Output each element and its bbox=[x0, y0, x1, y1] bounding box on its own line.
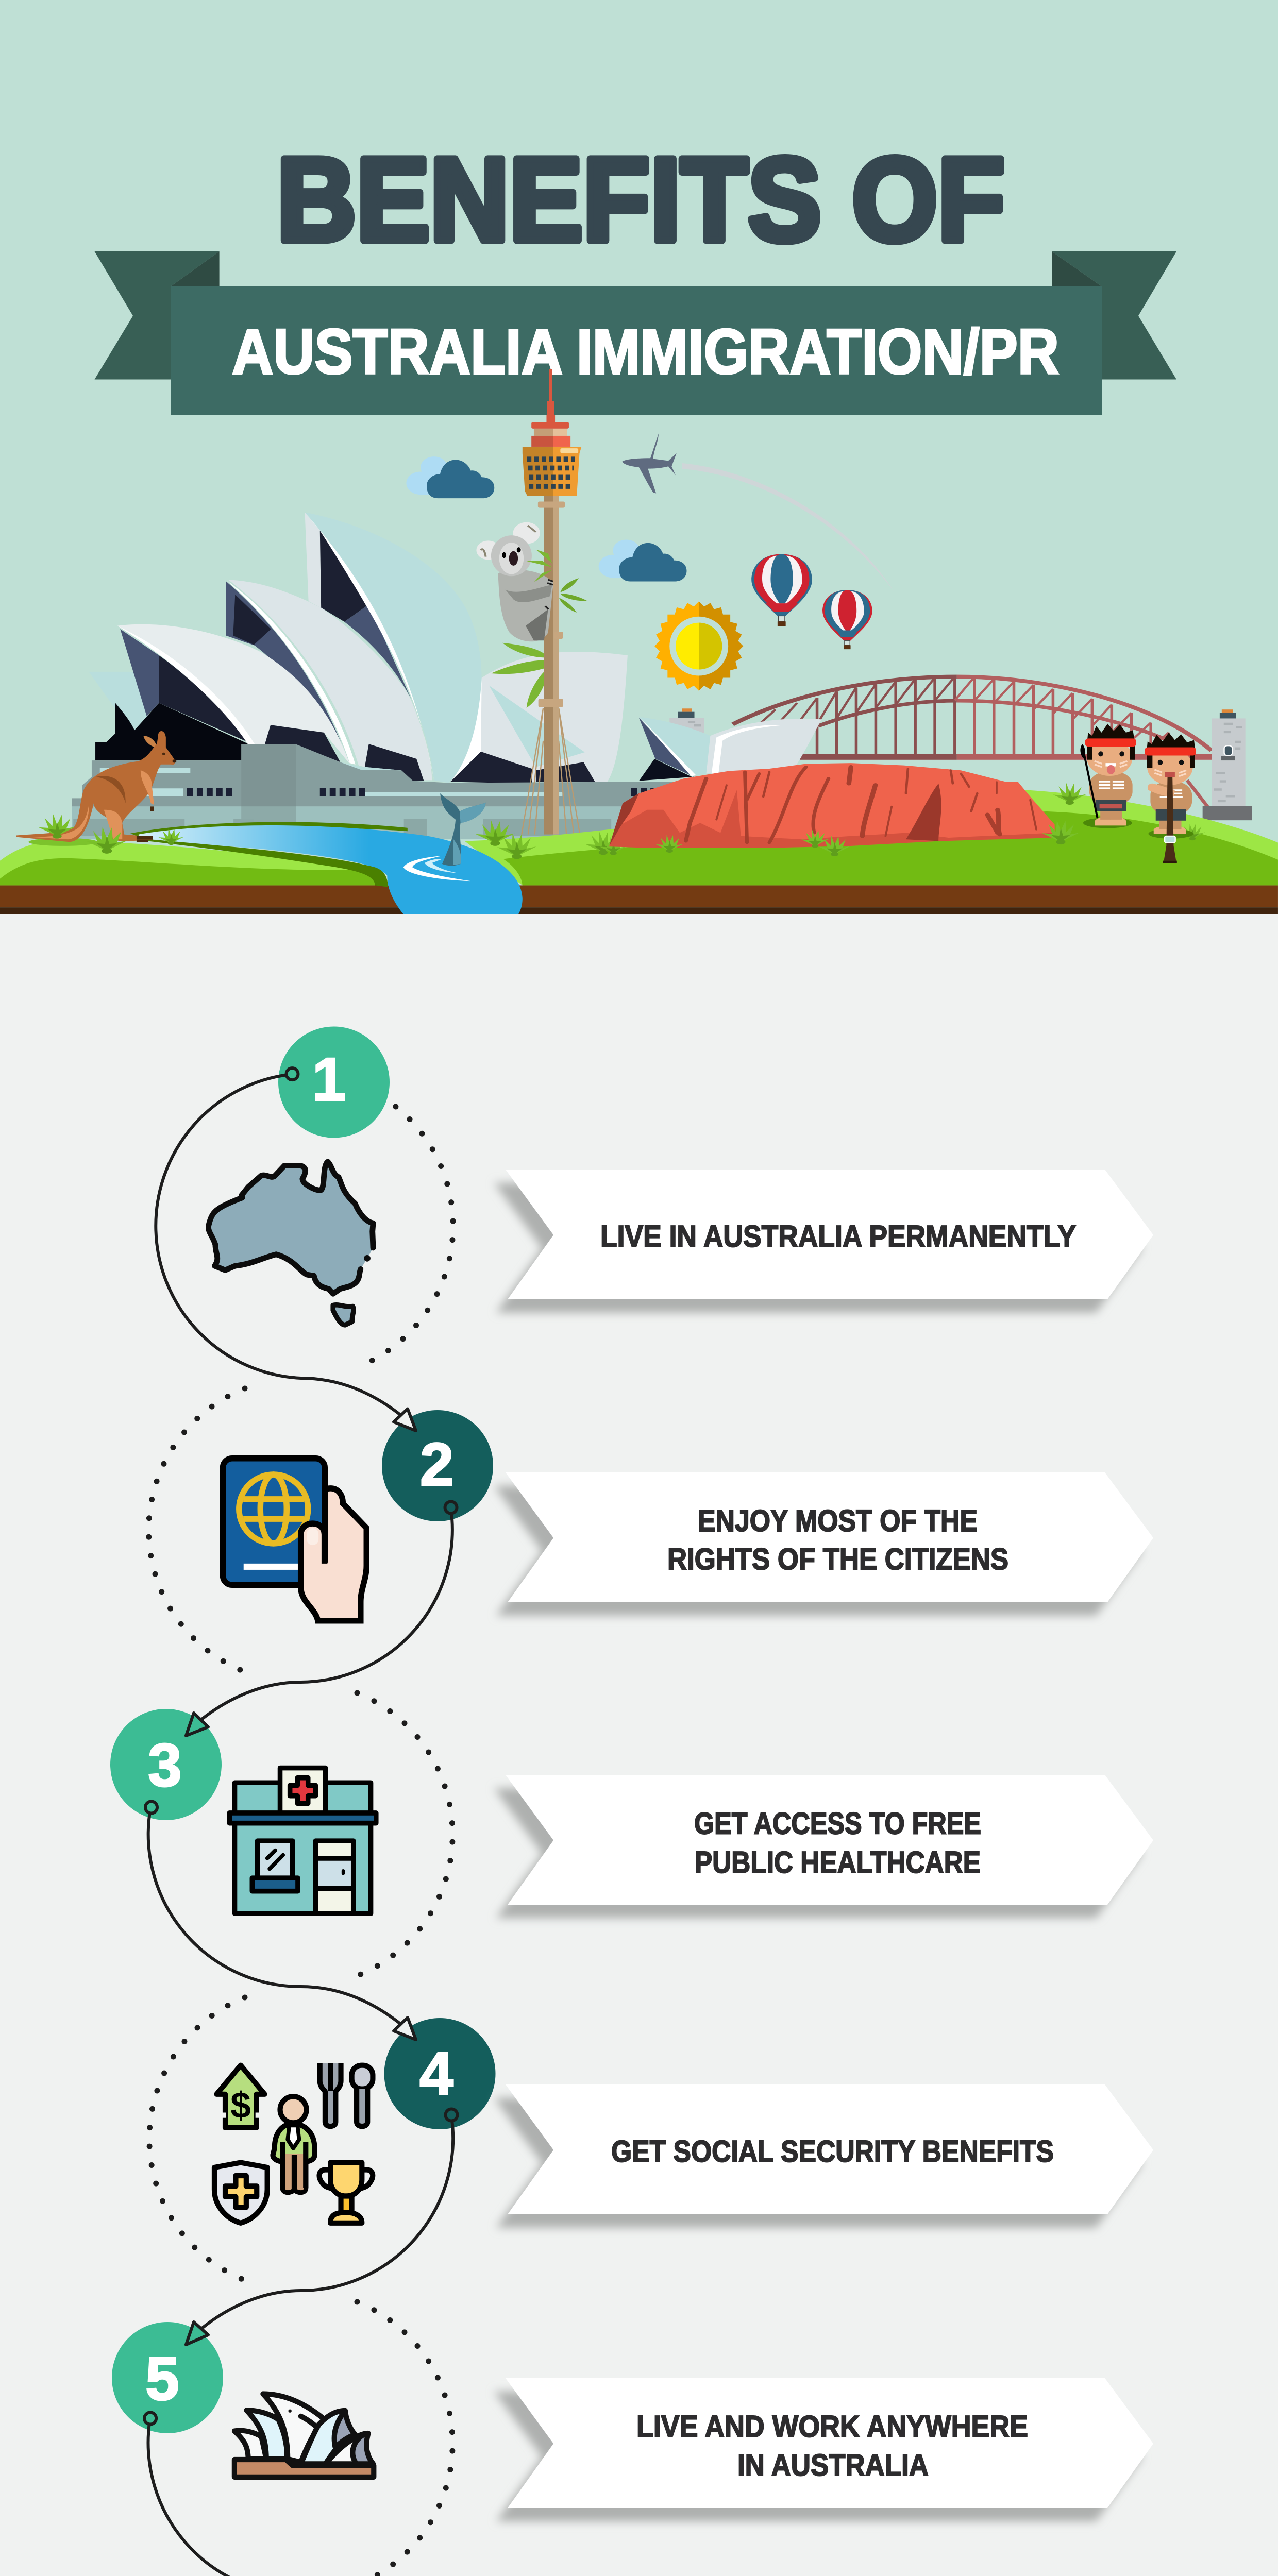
dotted guide arcs bbox=[149, 1096, 453, 2576]
tower needle over ribbon bbox=[547, 369, 554, 422]
ribbon banner body bbox=[171, 286, 1102, 415]
sun bbox=[654, 601, 743, 691]
numerals bbox=[145, 1046, 454, 2576]
benefit 3: ribbon: GET ACCESS TO FREE bbox=[694, 1806, 981, 1840]
sydney opera house bbox=[72, 513, 821, 839]
benefit 2: ribbon bbox=[494, 1472, 1153, 1616]
uluru rock and right-hand figures bbox=[609, 724, 1205, 863]
grass tufts right bbox=[656, 783, 1205, 856]
black silhouette bbox=[95, 703, 248, 760]
tall sail bbox=[305, 513, 482, 783]
harbour bridge bbox=[733, 676, 1212, 808]
benefit 3: ribbon: PUBLIC HEALTHCARE bbox=[695, 1845, 981, 1879]
airplane bbox=[623, 433, 677, 494]
number circle 2 bbox=[382, 1410, 493, 1521]
benefit 3: ribbon bbox=[494, 1775, 1153, 1918]
icon: passport in hand bbox=[223, 1459, 366, 1621]
benefit 5: ribbon: IN AUSTRALIA bbox=[737, 2448, 929, 2482]
podium building bbox=[72, 744, 693, 839]
uluru bbox=[609, 763, 1055, 848]
benefit 5: ribbon bbox=[494, 2378, 1153, 2521]
hot air balloon large bbox=[751, 554, 812, 626]
benefit 4: ribbon bbox=[494, 2084, 1153, 2228]
numerals: 1 bbox=[312, 1046, 346, 1114]
icon: opera house bbox=[234, 2394, 374, 2477]
kangaroo bbox=[16, 731, 176, 842]
benefit 2: ribbon: ENJOY MOST OF THE bbox=[698, 1504, 978, 1538]
rear sail right bbox=[481, 652, 628, 782]
sydney tower bbox=[522, 369, 581, 835]
numerals: 4 bbox=[419, 2040, 453, 2108]
bridge pylon left bbox=[669, 708, 704, 741]
hero scene illustration bbox=[0, 369, 1278, 914]
middle sail bbox=[226, 580, 432, 781]
grass tufts left bbox=[39, 814, 627, 859]
ground: soil layers bbox=[0, 885, 1278, 914]
right-hand sky items and bridge bbox=[623, 433, 1252, 820]
benefit 2: ribbon: RIGHTS OF THE CITIZENS bbox=[667, 1543, 1008, 1577]
number circle 5 bbox=[112, 2322, 223, 2433]
numerals: 5 bbox=[145, 2345, 179, 2413]
benefit 5: ribbon: LIVE AND WORK ANYWHERE bbox=[636, 2410, 1028, 2444]
ribbon banner right tail bbox=[1052, 251, 1176, 379]
subtitle on ribbon: AUSTRALIA IMMIGRATION/PR bbox=[232, 317, 1059, 387]
ground: grass bbox=[0, 790, 1278, 885]
benefit 1: ribbon bbox=[494, 1170, 1153, 1313]
numerals: 2 bbox=[420, 1431, 454, 1499]
koala and bamboo leaves bbox=[476, 522, 587, 708]
benefit 4: ribbon: GET SOCIAL SECURITY BENEFITS bbox=[611, 2134, 1054, 2168]
cloud left bbox=[406, 456, 494, 498]
connecting path with arrows bbox=[144, 1068, 459, 2576]
front sail bbox=[117, 624, 350, 764]
panel: hero header bbox=[0, 0, 1278, 914]
icon: public healthcare clinic bbox=[229, 1768, 376, 1913]
hot air balloon small bbox=[822, 590, 872, 649]
sky background bbox=[0, 0, 1278, 914]
aboriginal figure with spear bbox=[1080, 724, 1136, 828]
title: benefits of: BENEFITS OF bbox=[277, 133, 1005, 266]
aboriginal figure with didgeridoo bbox=[1145, 733, 1196, 863]
whale tail bbox=[403, 793, 486, 881]
benefit 1: ribbon: LIVE IN AUSTRALIA PERMANENTLY bbox=[600, 1219, 1076, 1253]
river bbox=[130, 822, 523, 914]
icon: australia map bbox=[208, 1162, 373, 1325]
ribbon banner left tail bbox=[95, 251, 220, 379]
panel: benefits timeline bbox=[110, 1026, 1155, 2576]
pale rear sail left bbox=[89, 672, 151, 736]
icon: social security benefits: $ bbox=[230, 2085, 251, 2126]
number circle 4 bbox=[384, 2018, 496, 2129]
icon: social security benefits bbox=[214, 2063, 373, 2223]
opera house right sails bbox=[639, 717, 821, 781]
cloud right bbox=[599, 539, 686, 581]
numerals: 3 bbox=[148, 1732, 182, 1800]
airplane trail bbox=[682, 463, 894, 591]
number circle 3 bbox=[110, 1709, 222, 1820]
bridge pylon right bbox=[1203, 709, 1252, 820]
number circle 1 bbox=[278, 1026, 390, 1138]
